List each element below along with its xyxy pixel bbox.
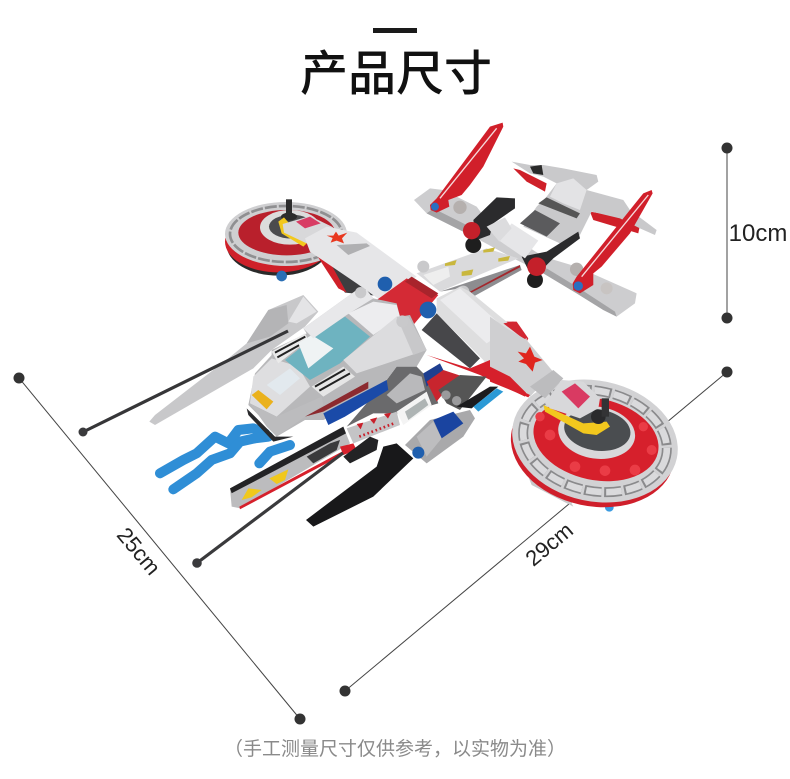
hazard stripes [252,390,273,409]
left wing top [305,227,417,300]
blue knobs [378,277,436,318]
gun pod [387,373,425,403]
fuselage [230,277,530,527]
left rotor [225,199,347,281]
rear wing bar [414,188,637,317]
red knobs [463,222,546,288]
lower vent [312,367,355,397]
side fairing [343,317,427,373]
wing tip [490,317,563,398]
dimension: length 25cm: 25cm [112,523,166,580]
inner ring and fan [555,402,639,464]
control panel sticker [267,368,300,395]
rotor bolt [605,503,614,512]
red stripe and blue blocks [305,380,388,425]
wing underside [313,250,387,297]
main wing and tail join [305,227,469,325]
rotor hub [543,380,610,435]
red studded disc [526,386,666,492]
gun slab [230,427,350,509]
red centre section [377,278,438,325]
side wing and lightning effects [149,295,318,489]
title: 产品尺寸 [300,34,492,104]
gun panel [347,412,400,443]
silver panel [397,392,432,425]
right wing [422,287,530,397]
dimension: length 25cm [14,372,306,724]
flanges [528,477,573,507]
footnote: （手工测量尺寸仅供参考，以实物为准） [224,734,566,761]
dimension: width 29cm: 29cm [521,517,578,571]
cockpit block [348,302,400,335]
grey pod [405,410,475,463]
red fin left [430,123,503,213]
rear rod line [192,453,343,568]
tail boom deck [417,247,522,297]
black engine blocks [473,197,580,270]
mechanical backing [347,367,438,427]
toy aircraft model [78,123,689,568]
front rod [78,331,288,436]
rear fairing [303,290,373,338]
rear tail assembly [414,123,657,317]
rear rod mount [340,437,378,463]
black ski [306,443,413,527]
hull [247,287,427,442]
red fin right [573,190,653,293]
rotor base [500,373,686,522]
segment ring [514,377,676,505]
centre silver block [498,223,538,258]
dimension: height 10cm [722,142,787,324]
dimension: height 10cm: 10cm [729,220,787,247]
red engine behind wing [503,322,528,342]
right rotor [490,317,689,522]
star insignia [327,232,347,243]
red block and mechanics [423,363,503,412]
tail plane [512,162,657,243]
canopy [285,317,370,380]
title accent bar [373,28,417,33]
lightning [160,428,290,489]
side wing [149,295,318,425]
upper vent [272,333,308,363]
dimension: width 29cm [340,366,732,696]
